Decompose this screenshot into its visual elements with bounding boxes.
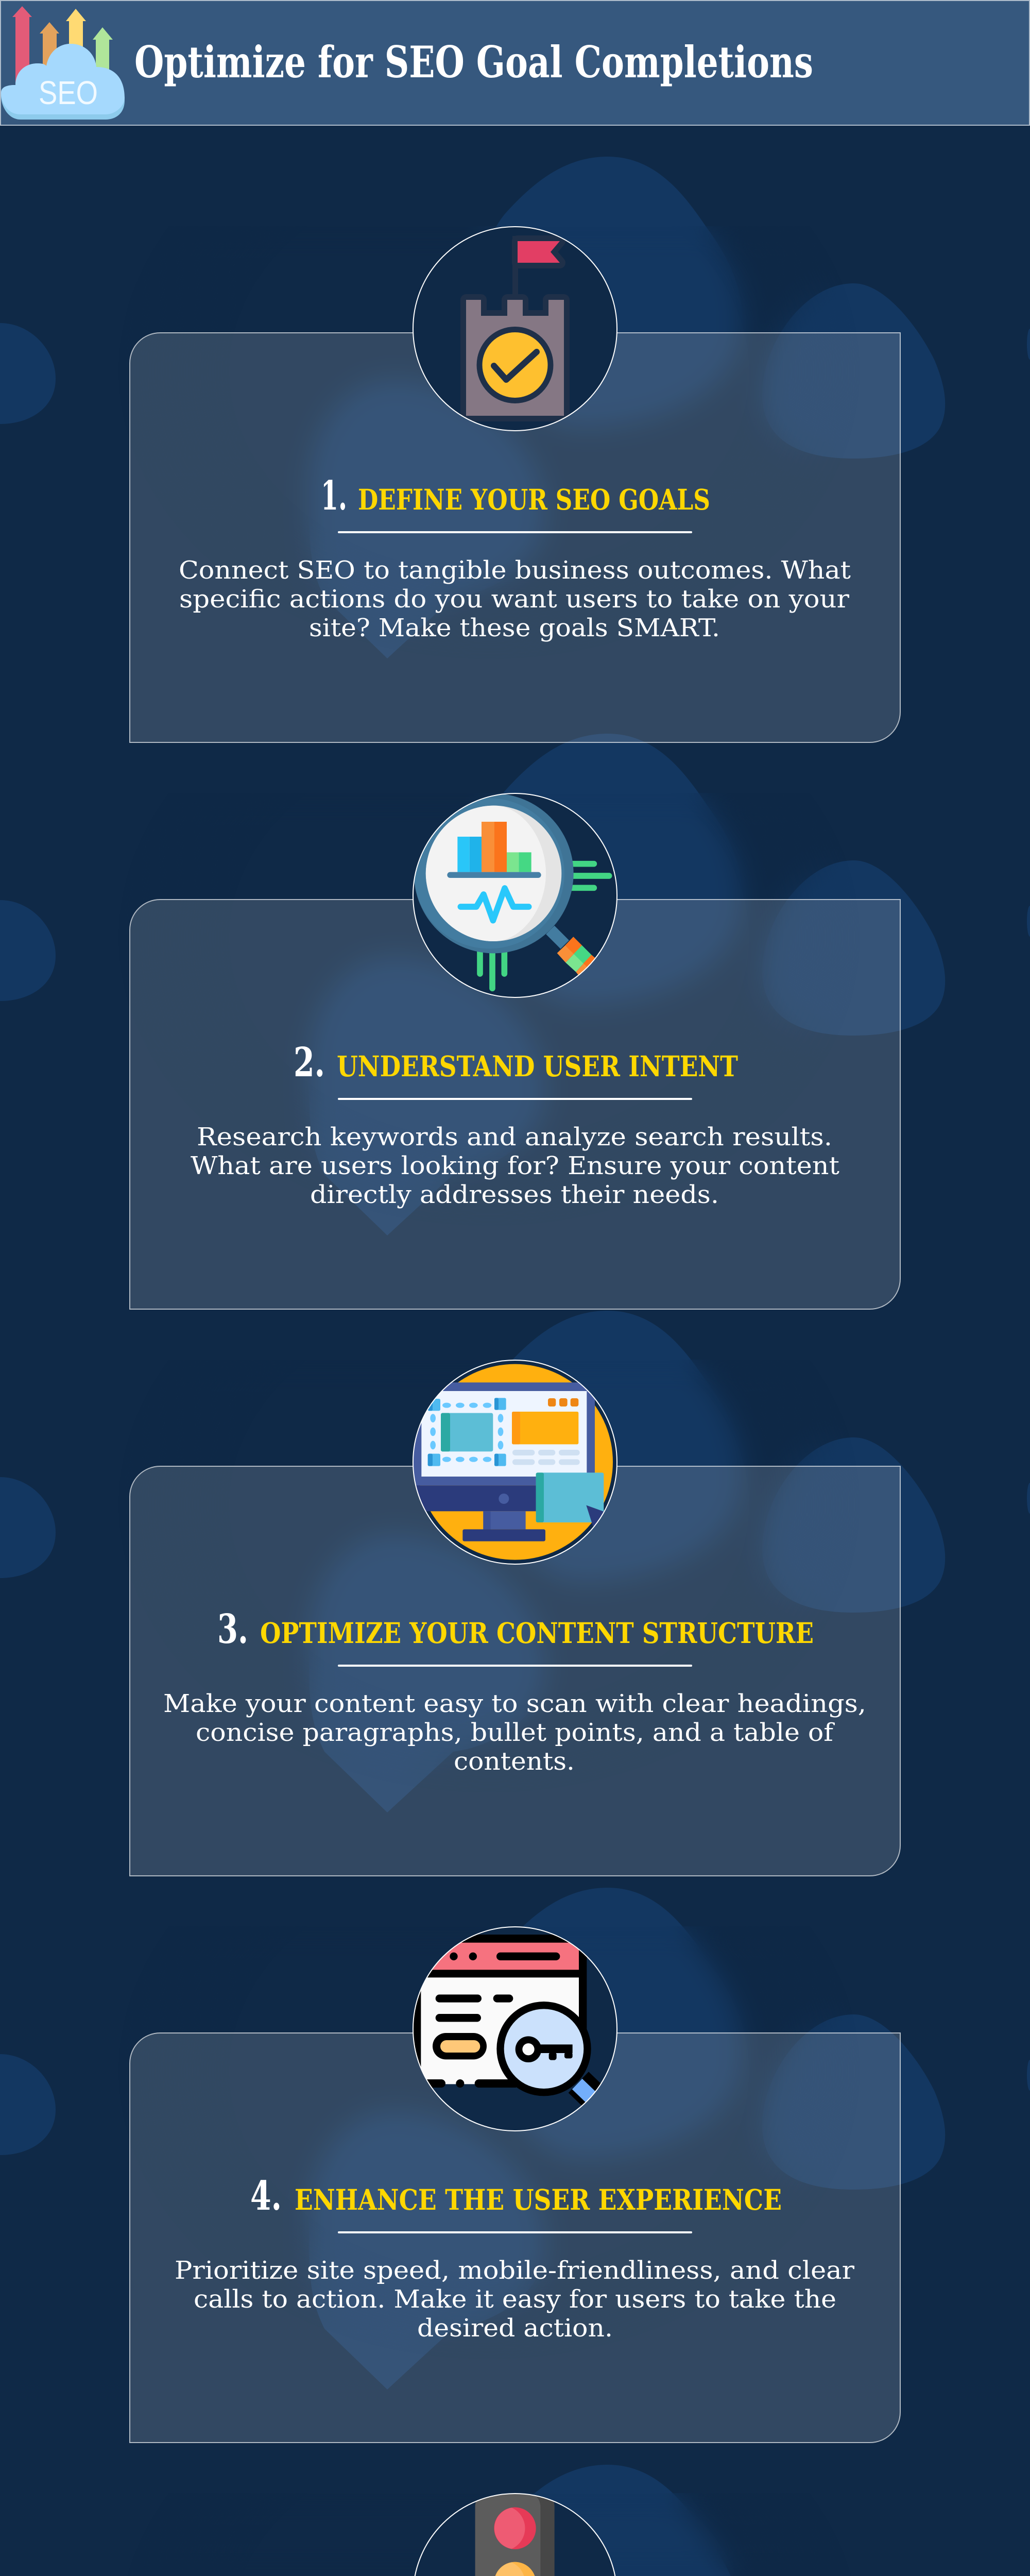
- body text: Make your content easy to scan with clear headings,: [163, 1689, 866, 1718]
- panel: step 1 define your SEO goals: [129, 226, 901, 743]
- body text: [175, 2256, 854, 2343]
- icon: SEO cloud with arrows: [1, 6, 125, 120]
- icon: tower with flag and check badge: [413, 227, 617, 431]
- heading: ENHANCE THE USER EXPERIENCE: [295, 2183, 782, 2216]
- body text: specific actions do you want users to take on your: [179, 585, 849, 614]
- panel: step 5 track, measure, and refine: [414, 2493, 616, 2576]
- heading: 1.: [321, 472, 347, 519]
- body text: Prioritize site speed, mobile-friendliness, and clear: [175, 2256, 854, 2285]
- body text: Connect SEO to tangible business outcomes. What: [179, 556, 851, 585]
- body text: directly addresses their needs.: [310, 1180, 719, 1209]
- body text: [191, 1123, 839, 1209]
- heading: OPTIMIZE YOUR CONTENT STRUCTURE: [260, 1616, 814, 1650]
- title: Optimize for SEO Goal Completions: [134, 37, 813, 88]
- card background: [129, 899, 901, 1310]
- body text: [163, 1689, 866, 1776]
- heading: [294, 1039, 738, 1086]
- body text: [179, 556, 851, 642]
- body text: Research keywords and analyze search results.: [197, 1123, 832, 1151]
- panel: step 4 enhance the user experience: [129, 1926, 901, 2443]
- panel: step 2 understand user intent: [129, 793, 901, 1310]
- heading: 2.: [294, 1039, 325, 1086]
- card background: [129, 2032, 901, 2443]
- heading: [250, 2173, 782, 2219]
- heading: [217, 1606, 814, 1653]
- card background: [129, 332, 901, 743]
- heading: 4.: [250, 2173, 282, 2219]
- heading: [321, 472, 710, 519]
- heading: UNDERSTAND USER INTENT: [337, 1049, 738, 1083]
- heading: DEFINE YOUR SEO GOALS: [358, 483, 710, 516]
- panel: step 3 optimize your content structure: [129, 1360, 901, 1876]
- header banner: [0, 0, 1030, 126]
- body text: site? Make these goals SMART.: [309, 614, 720, 642]
- body text: contents.: [454, 1747, 575, 1776]
- body text: What are users looking for? Ensure your content: [191, 1151, 839, 1180]
- heading: 3.: [217, 1606, 248, 1653]
- card background: [129, 1466, 901, 1876]
- body text: concise paragraphs, bullet points, and a table of: [196, 1718, 835, 1747]
- icon: traffic light: [413, 2492, 617, 2576]
- body text: desired action.: [417, 2314, 613, 2343]
- body text: calls to action. Make it easy for users to take the: [194, 2285, 836, 2314]
- icon: browser window with key magnifier: [413, 1927, 617, 2131]
- icon: magnifier over chart: [413, 793, 617, 997]
- icon: monitor with layout blocks: [408, 1360, 617, 1564]
- icon: SEO cloud with arrows: SEO: [39, 74, 98, 111]
